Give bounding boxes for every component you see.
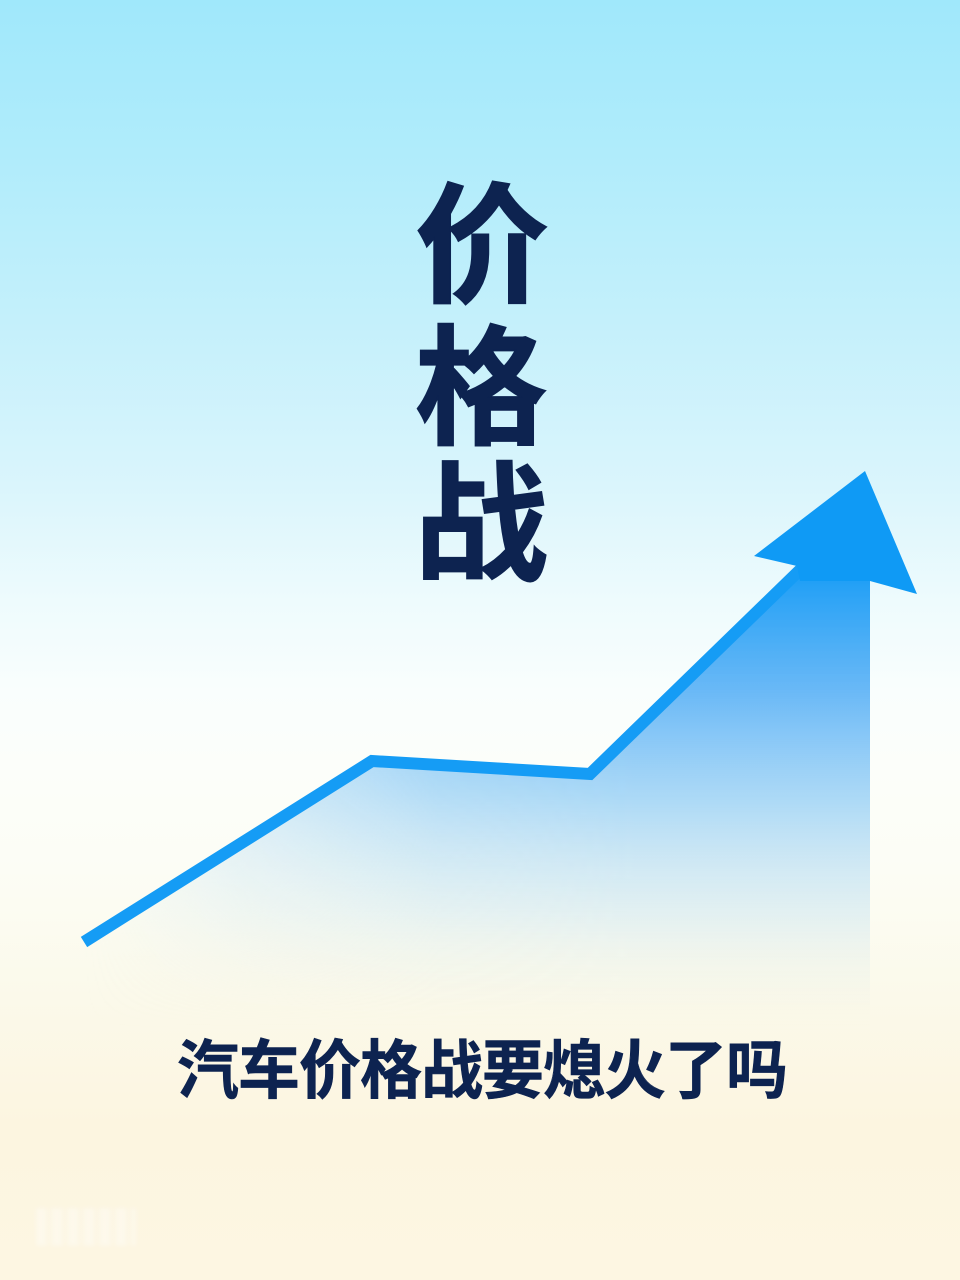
- title character 1: 价: [415, 174, 549, 320]
- subtitle: 汽车价格战要熄火了吗: [177, 1036, 787, 1107]
- title character 2: 格: [415, 316, 547, 462]
- area fill under the line: [168, 578, 870, 970]
- trend line: [84, 566, 804, 942]
- rising arrow chart: [80, 471, 917, 970]
- faint watermark: [36, 1208, 136, 1246]
- arrow head: [754, 471, 917, 594]
- vertical title: [414, 174, 549, 598]
- title character 3: 战: [414, 452, 548, 598]
